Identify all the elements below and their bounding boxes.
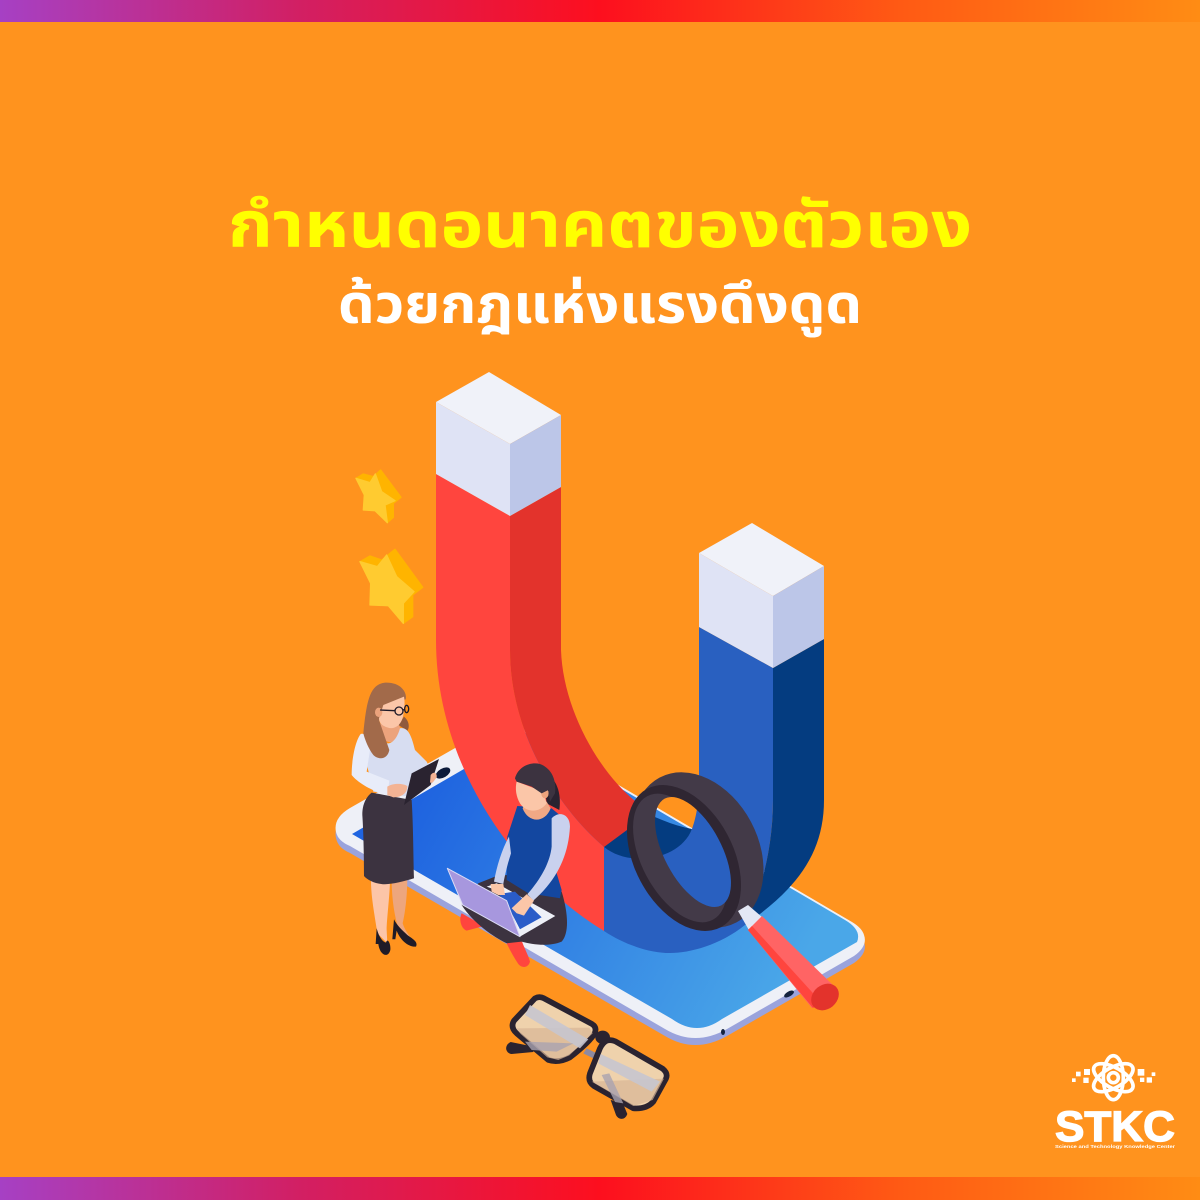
title line 1: กำหนดอนาคตของตัวเอง xyxy=(228,189,972,261)
red foot left xyxy=(460,913,484,931)
large star xyxy=(360,549,423,623)
trousers xyxy=(462,875,567,945)
glasses on woman xyxy=(380,705,409,715)
metal collar xyxy=(738,905,762,932)
small star xyxy=(356,470,401,523)
icon: horseshoe magnet xyxy=(436,372,824,953)
hair back xyxy=(398,717,409,731)
ear xyxy=(541,788,549,798)
blouse sleeve xyxy=(352,734,389,795)
lens reflections xyxy=(516,1005,664,1106)
hands xyxy=(491,884,505,895)
phone jack xyxy=(721,1029,725,1035)
face xyxy=(379,697,405,728)
title line 2: ด้วยกฎแห่งแรงดึงดูด xyxy=(338,275,862,337)
hair xyxy=(363,683,406,758)
magnet blue arm front xyxy=(604,627,773,953)
ear xyxy=(375,708,382,717)
left lens xyxy=(512,997,596,1061)
phone port xyxy=(783,989,795,999)
person: seated woman with laptop xyxy=(447,763,570,967)
keyboard keys xyxy=(498,892,542,929)
sleeve left xyxy=(494,837,511,884)
logo tagline: Science and Technology Knowledge Center xyxy=(1055,1144,1175,1150)
icon: stars xyxy=(356,470,423,623)
hair top xyxy=(515,763,555,802)
lens ring xyxy=(627,772,764,931)
magnet red arm front xyxy=(436,474,604,931)
logo atom mark xyxy=(1089,1056,1137,1100)
logo wordmark: STKC xyxy=(1055,1103,1175,1151)
blouse xyxy=(367,728,432,797)
magnet red arm side xyxy=(510,487,640,847)
logo pixel squares xyxy=(1072,1069,1155,1083)
temple arms xyxy=(506,1042,627,1119)
fingers xyxy=(430,773,437,783)
right white cap xyxy=(699,523,824,668)
magnet blue arm side xyxy=(745,639,824,925)
handle xyxy=(738,905,844,1016)
title xyxy=(228,189,972,337)
icon: eyeglasses xyxy=(506,997,667,1119)
left white cap xyxy=(436,372,561,516)
neck xyxy=(380,720,402,742)
bottom gradient bar xyxy=(0,1177,1200,1200)
torso xyxy=(507,806,562,898)
right leg xyxy=(392,877,413,942)
logo: STKC xyxy=(1055,1056,1175,1151)
hair back xyxy=(543,773,560,810)
top gradient bar xyxy=(0,0,1200,22)
icon: smartphone xyxy=(336,719,865,1045)
right lens xyxy=(589,1040,667,1108)
laptop lid xyxy=(447,868,520,937)
neck xyxy=(523,802,551,820)
hand xyxy=(387,784,407,797)
person: standing woman xyxy=(352,683,439,955)
bridge xyxy=(595,1031,610,1044)
icon: magnifying glass xyxy=(627,772,839,1010)
left leg xyxy=(371,878,390,943)
skirt xyxy=(362,793,414,884)
red foot right xyxy=(507,938,530,967)
face xyxy=(516,782,547,811)
handle end xyxy=(806,978,844,1016)
magnet inner blue arc xyxy=(604,805,692,860)
phone speaker xyxy=(434,765,452,781)
keyboard base xyxy=(487,883,555,937)
sleeve right xyxy=(527,814,570,901)
tablet xyxy=(404,759,439,805)
shoes xyxy=(376,919,417,955)
